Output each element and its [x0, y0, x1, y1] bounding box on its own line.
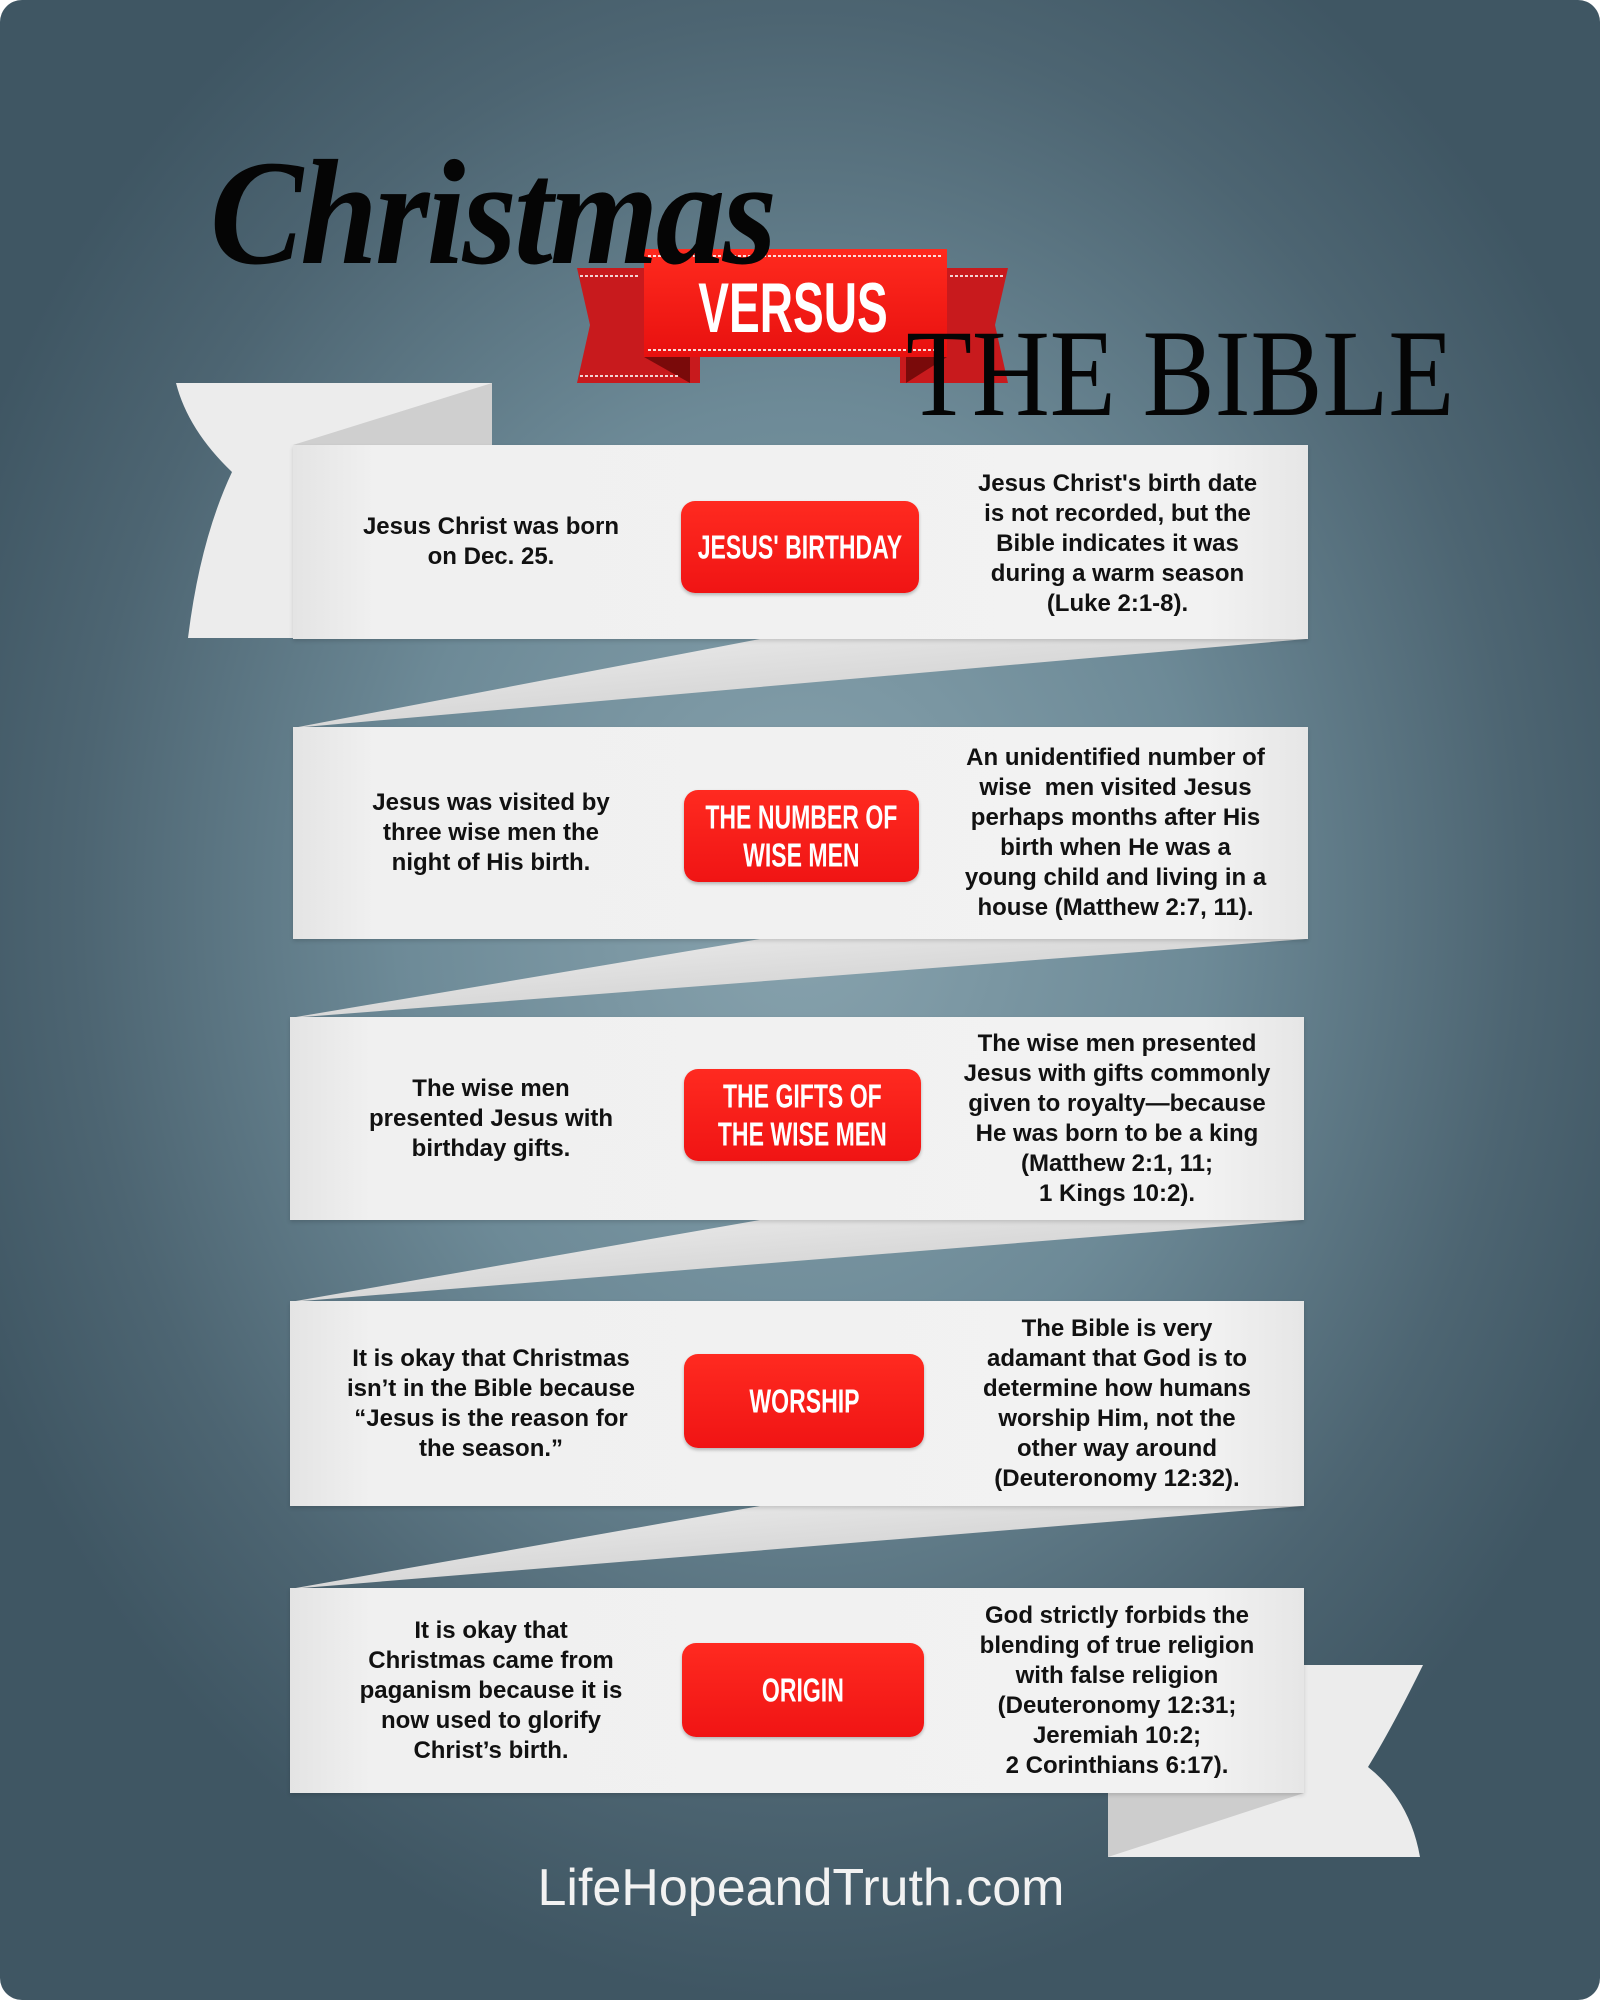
right text	[983, 1314, 1251, 1492]
title: THE BIBLE: THE BIBLE	[906, 305, 1454, 442]
versus ribbon: VERSUS	[698, 268, 888, 347]
left text	[360, 1616, 622, 1764]
left text: birthday gifts.	[412, 1134, 570, 1162]
left text: three wise men the	[383, 819, 599, 846]
left text	[372, 789, 610, 876]
right text: (Luke 2:1-8).	[1047, 590, 1188, 617]
right text: blending of true religion	[980, 1632, 1254, 1658]
right text	[978, 470, 1257, 617]
right text: Bible indicates it was	[996, 530, 1239, 557]
right text: given to royalty—because	[968, 1090, 1266, 1116]
right text: other way around	[1017, 1434, 1217, 1462]
left text: Jesus was visited by	[372, 789, 610, 816]
right text: (Matthew 2:1, 11;	[1021, 1150, 1213, 1176]
left text: presented Jesus with	[369, 1104, 613, 1132]
right text: wise men visited Jesus	[979, 774, 1252, 801]
right text: Jesus with gifts commonly	[964, 1060, 1270, 1086]
right text	[964, 1030, 1270, 1206]
right text: birth when He was a	[1000, 834, 1231, 861]
left text: isn’t in the Bible because	[347, 1374, 635, 1402]
fold 1	[293, 639, 1306, 728]
left text	[347, 1344, 635, 1462]
versus ribbon	[577, 249, 1008, 383]
left text: The wise men	[412, 1074, 570, 1102]
right text: He was born to be a king	[976, 1120, 1258, 1146]
left text: paganism because it is	[360, 1676, 622, 1704]
title: Christmas: Christmas	[210, 130, 774, 296]
left text: It is okay that Christmas	[352, 1344, 630, 1372]
right text	[965, 744, 1266, 921]
right text: Jeremiah 10:2;	[1033, 1722, 1201, 1748]
right text: (Deuteronomy 12:31;	[998, 1692, 1236, 1718]
right text: adamant that God is to	[987, 1344, 1247, 1372]
right text: worship Him, not the	[998, 1404, 1236, 1432]
right text: An unidentified number of	[966, 744, 1265, 771]
label: THE GIFTS OF	[723, 1077, 882, 1115]
label: WORSHIP	[749, 1382, 859, 1420]
fold 3	[290, 1220, 1302, 1302]
left text	[369, 1074, 613, 1162]
left text: Jesus Christ was born	[363, 513, 619, 540]
right text: God strictly forbids the	[985, 1602, 1249, 1628]
right text: (Deuteronomy 12:32).	[994, 1464, 1240, 1492]
label: WISE MEN	[743, 836, 860, 874]
right text: 1 Kings 10:2).	[1039, 1180, 1195, 1206]
panel: gifts of the wise men	[290, 1017, 1304, 1220]
panel: number of wise men	[293, 727, 1308, 939]
panel: origin	[290, 1588, 1304, 1793]
label	[684, 1354, 924, 1448]
right text: house (Matthew 2:7, 11).	[977, 894, 1254, 921]
label: JESUS' BIRTHDAY	[698, 528, 902, 566]
panel: Jesus' birthday	[293, 445, 1308, 639]
right text: 2 Corinthians 6:17).	[1006, 1752, 1228, 1778]
fold 4	[290, 1506, 1302, 1589]
right text: perhaps months after His	[971, 804, 1260, 831]
left text: night of His birth.	[392, 849, 590, 876]
left text: now used to glorify	[381, 1706, 601, 1734]
left text: Christmas came from	[368, 1646, 614, 1674]
label: ORIGIN	[762, 1671, 844, 1709]
right text: The wise men presented	[978, 1030, 1256, 1056]
left text: the season.”	[419, 1434, 563, 1462]
left text: Christ’s birth.	[413, 1736, 569, 1764]
label	[681, 501, 919, 593]
right text: Jesus Christ's birth date	[978, 470, 1257, 497]
label: THE WISE MEN	[718, 1115, 887, 1153]
label	[684, 790, 919, 882]
panel: worship	[290, 1301, 1304, 1506]
tail: bottom-right	[1108, 1665, 1423, 1857]
right text: The Bible is very	[1022, 1314, 1212, 1342]
label	[682, 1643, 924, 1737]
left text: on Dec. 25.	[428, 543, 554, 570]
right text: determine how humans	[983, 1374, 1251, 1402]
label	[684, 1069, 921, 1161]
right text: with false religion	[1016, 1662, 1218, 1688]
right text: young child and living in a	[965, 864, 1266, 891]
right text	[980, 1602, 1254, 1778]
footer: website: LifeHopeandTruth.com	[537, 1859, 1065, 1917]
left text: It is okay that	[414, 1616, 568, 1644]
fold 2	[290, 939, 1306, 1018]
label: THE NUMBER OF	[706, 798, 897, 836]
tail: top-left	[176, 383, 492, 638]
right text: during a warm season	[991, 560, 1244, 587]
left text	[363, 513, 619, 570]
left text: “Jesus is the reason for	[354, 1404, 628, 1432]
right text: is not recorded, but the	[984, 500, 1251, 527]
